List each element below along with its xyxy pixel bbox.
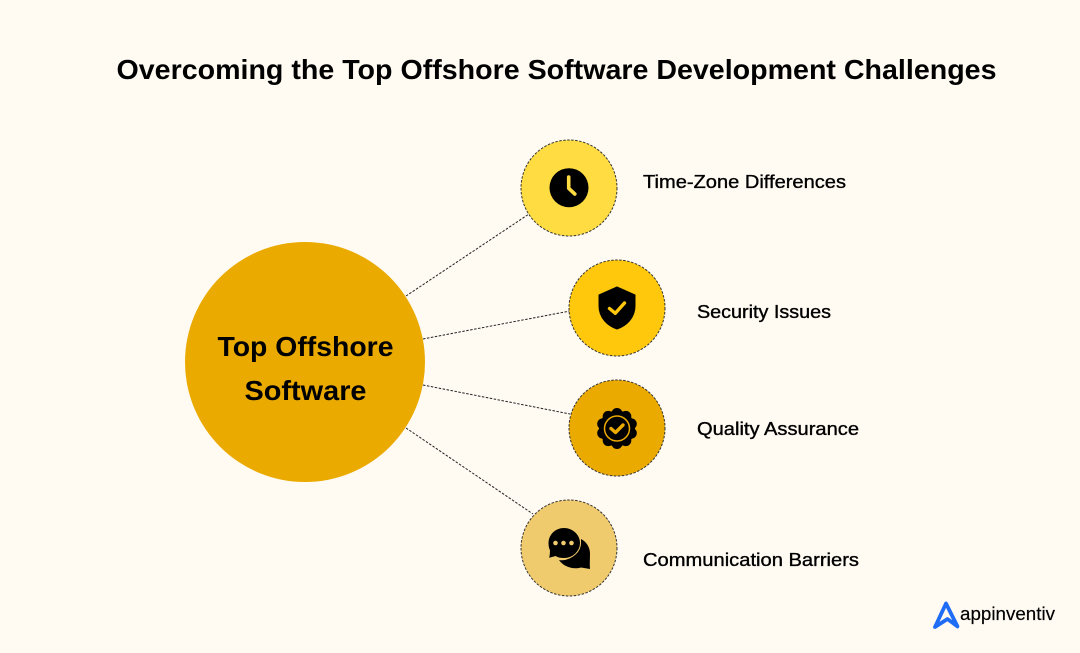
title: Overcoming the Top Offshore Software Development Challenges [116,54,997,85]
node: quality assurance [569,380,665,476]
icon: badge [597,408,637,449]
label: security issues: Security Issues [697,302,831,322]
node: security issues [569,260,665,356]
connector lines [406,214,570,514]
icon: shield [599,287,635,329]
logo wordmark: appinventiv [960,603,1056,624]
label: quality assurance: Quality Assurance [697,419,859,439]
central circle: Top Offshore [218,331,394,362]
central circle: Software [244,375,366,406]
node: time-zone differences [521,140,617,236]
label: communication barriers: Communication Barriers [643,550,859,570]
central circle [185,242,425,482]
icon: chat bubbles [548,528,590,569]
icon: clock [550,168,588,207]
logo: appinventiv [935,603,1056,627]
label: time-zone differences: Time-Zone Differences [643,172,846,192]
node: communication barriers [521,500,617,596]
icon: logo arrow [935,604,958,627]
